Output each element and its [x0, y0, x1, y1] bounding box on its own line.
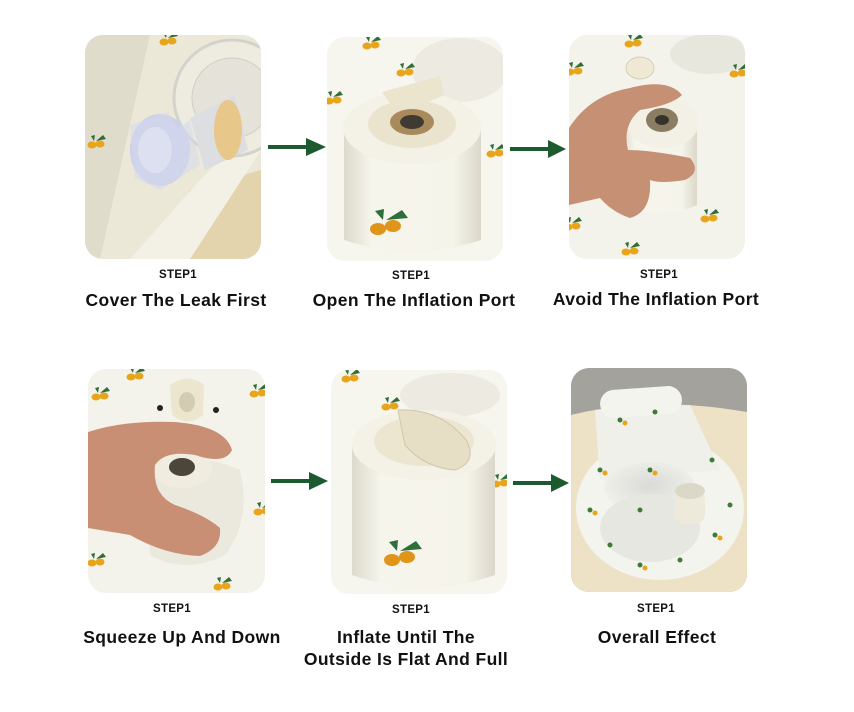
panel 4: squeeze	[88, 367, 272, 593]
caption 5: Inflate Until The	[337, 627, 475, 647]
panel 6: overall effect	[571, 368, 747, 592]
caption 3: STEP1	[640, 269, 678, 281]
caption 5: Outside Is Flat And Full	[304, 649, 508, 669]
caption 3: Avoid The Inflation Port	[553, 289, 759, 309]
caption 5	[304, 604, 508, 669]
arrow 3	[271, 472, 328, 490]
caption 6: Overall Effect	[598, 627, 716, 647]
caption 1	[85, 269, 267, 310]
caption 2	[313, 270, 515, 310]
caption 2: STEP1	[392, 270, 430, 282]
caption 5: STEP1	[392, 604, 430, 616]
caption 3	[553, 269, 759, 309]
caption 4: STEP1	[153, 603, 191, 615]
arrow 4	[513, 474, 569, 492]
arrow 1	[268, 138, 326, 156]
caption 4: Squeeze Up And Down	[83, 627, 281, 647]
arrow 2	[510, 140, 566, 158]
caption 1: Cover The Leak First	[85, 290, 267, 310]
caption 2: Open The Inflation Port	[313, 290, 515, 310]
caption 1: STEP1	[159, 269, 197, 281]
panel 1: cover the leak	[85, 35, 261, 259]
caption 4	[83, 603, 281, 647]
panel 5: inflate until flat	[331, 369, 510, 594]
caption 6: STEP1	[637, 603, 675, 615]
panel 2: open the port	[324, 36, 508, 261]
caption 6	[598, 603, 716, 647]
panel 3: avoid the port	[564, 34, 750, 259]
